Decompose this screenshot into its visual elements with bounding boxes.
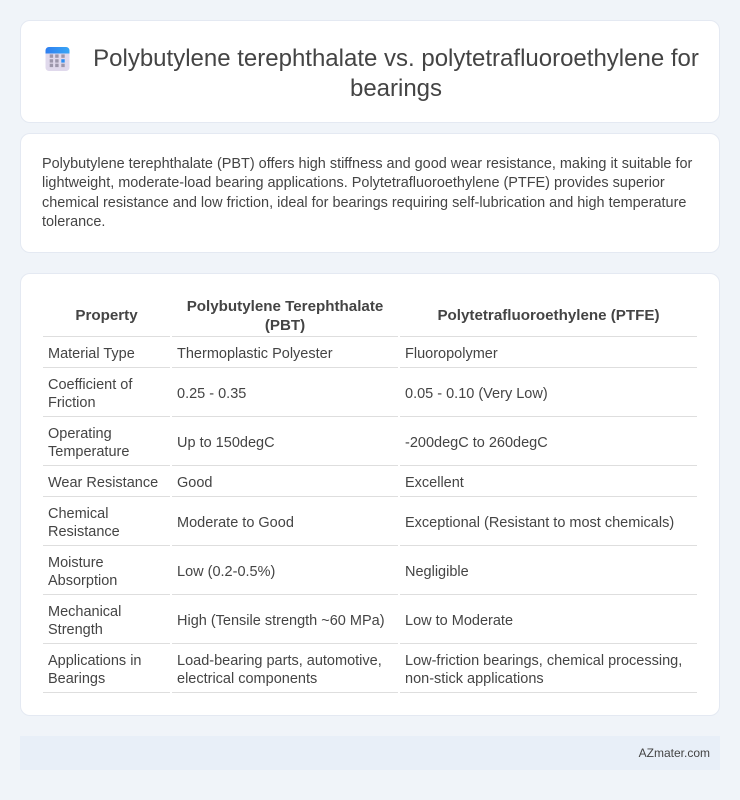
row: mechanical strength: Low to Moderate: [405, 613, 513, 629]
row: operating temperature: Temperature: [48, 444, 129, 460]
row: coefficient of friction: 0.05 - 0.10 (Very Low): [405, 386, 548, 402]
row: moisture absorption: Absorption: [48, 573, 117, 589]
row: applications in bearings: Applications in: [48, 653, 142, 669]
text block: introduction: Polybutylene terephthalate (PBT) offers high stiffness and good wear resistance, making it suitable for: [42, 156, 692, 172]
row: chemical resistance: Chemical: [48, 506, 108, 522]
panel: introduction: [20, 133, 720, 253]
row: mechanical strength: [48, 604, 513, 638]
footer credit: AZmater.com: [639, 746, 710, 760]
row: chemical resistance: Resistance: [48, 524, 120, 540]
row: mechanical strength: High (Tensile strength ~60 MPa): [177, 613, 385, 629]
panel: comparison table: [20, 273, 720, 716]
row: applications in bearings: Load-bearing parts, automotive,: [177, 653, 382, 669]
text block: introduction: tolerance.: [42, 214, 105, 230]
row: coefficient of friction: 0.25 - 0.35: [177, 386, 246, 402]
row: applications in bearings: electrical components: [177, 671, 317, 687]
row: applications in bearings: Bearings: [48, 671, 105, 687]
table header row: Polybutylene Terephthalate: [187, 298, 383, 315]
row: operating temperature: -200degC to 260degC: [405, 435, 548, 451]
text block: introduction: chemical resistance and low friction, ideal for bearings requiring self-lubrication and high temperature: [42, 195, 686, 211]
row: coefficient of friction: [48, 377, 548, 411]
row: chemical resistance: Exceptional (Resistant to most chemicals): [405, 515, 674, 531]
row: coefficient of friction: Coefficient of: [48, 377, 132, 393]
table header row: (PBT): [265, 317, 305, 334]
row: chemical resistance: Moderate to Good: [177, 515, 294, 531]
row: material type: [48, 346, 498, 362]
row: applications in bearings: Low-friction bearings, chemical processing,: [405, 653, 682, 669]
table header row: Polytetrafluoroethylene (PTFE): [437, 307, 660, 324]
text block: introduction: [42, 156, 692, 230]
row: operating temperature: [48, 426, 548, 460]
row: operating temperature: Operating: [48, 426, 112, 442]
row: mechanical strength: Mechanical: [48, 604, 121, 620]
row: moisture absorption: Low (0.2-0.5%): [177, 564, 275, 580]
row: material type: Material Type: [48, 346, 135, 362]
row: moisture absorption: Moisture: [48, 555, 104, 571]
row: material type: Fluoropolymer: [405, 346, 498, 362]
row: mechanical strength: Strength: [48, 622, 103, 638]
row: coefficient of friction: Friction: [48, 395, 96, 411]
row: material type: Thermoplastic Polyester: [177, 346, 333, 362]
row: moisture absorption: Negligible: [405, 564, 469, 580]
table header row: [75, 298, 660, 334]
text block: introduction: lightweight, moderate-load bearing applications. Polytetrafluoroethylene (PTFE) provides superior: [42, 175, 665, 191]
panel: title card: [20, 20, 720, 123]
row: applications in bearings: non-stick applications: [405, 671, 544, 687]
icon: calendar grid: [46, 47, 70, 71]
row: wear resistance: Excellent: [405, 475, 464, 491]
title: Polybutylene terephthalate vs. polytetrafluoroethylene for bearings: [93, 45, 699, 102]
row: wear resistance: [48, 475, 464, 491]
table header row: Property: [75, 307, 138, 324]
footer bar: [20, 736, 720, 770]
row: operating temperature: Up to 150degC: [177, 435, 275, 451]
row: moisture absorption: [48, 555, 469, 589]
comparison table: [43, 298, 697, 693]
row: wear resistance: Wear Resistance: [48, 475, 158, 491]
row: wear resistance: Good: [177, 475, 212, 491]
row: chemical resistance: [48, 506, 674, 540]
row: applications in bearings: [48, 653, 682, 687]
